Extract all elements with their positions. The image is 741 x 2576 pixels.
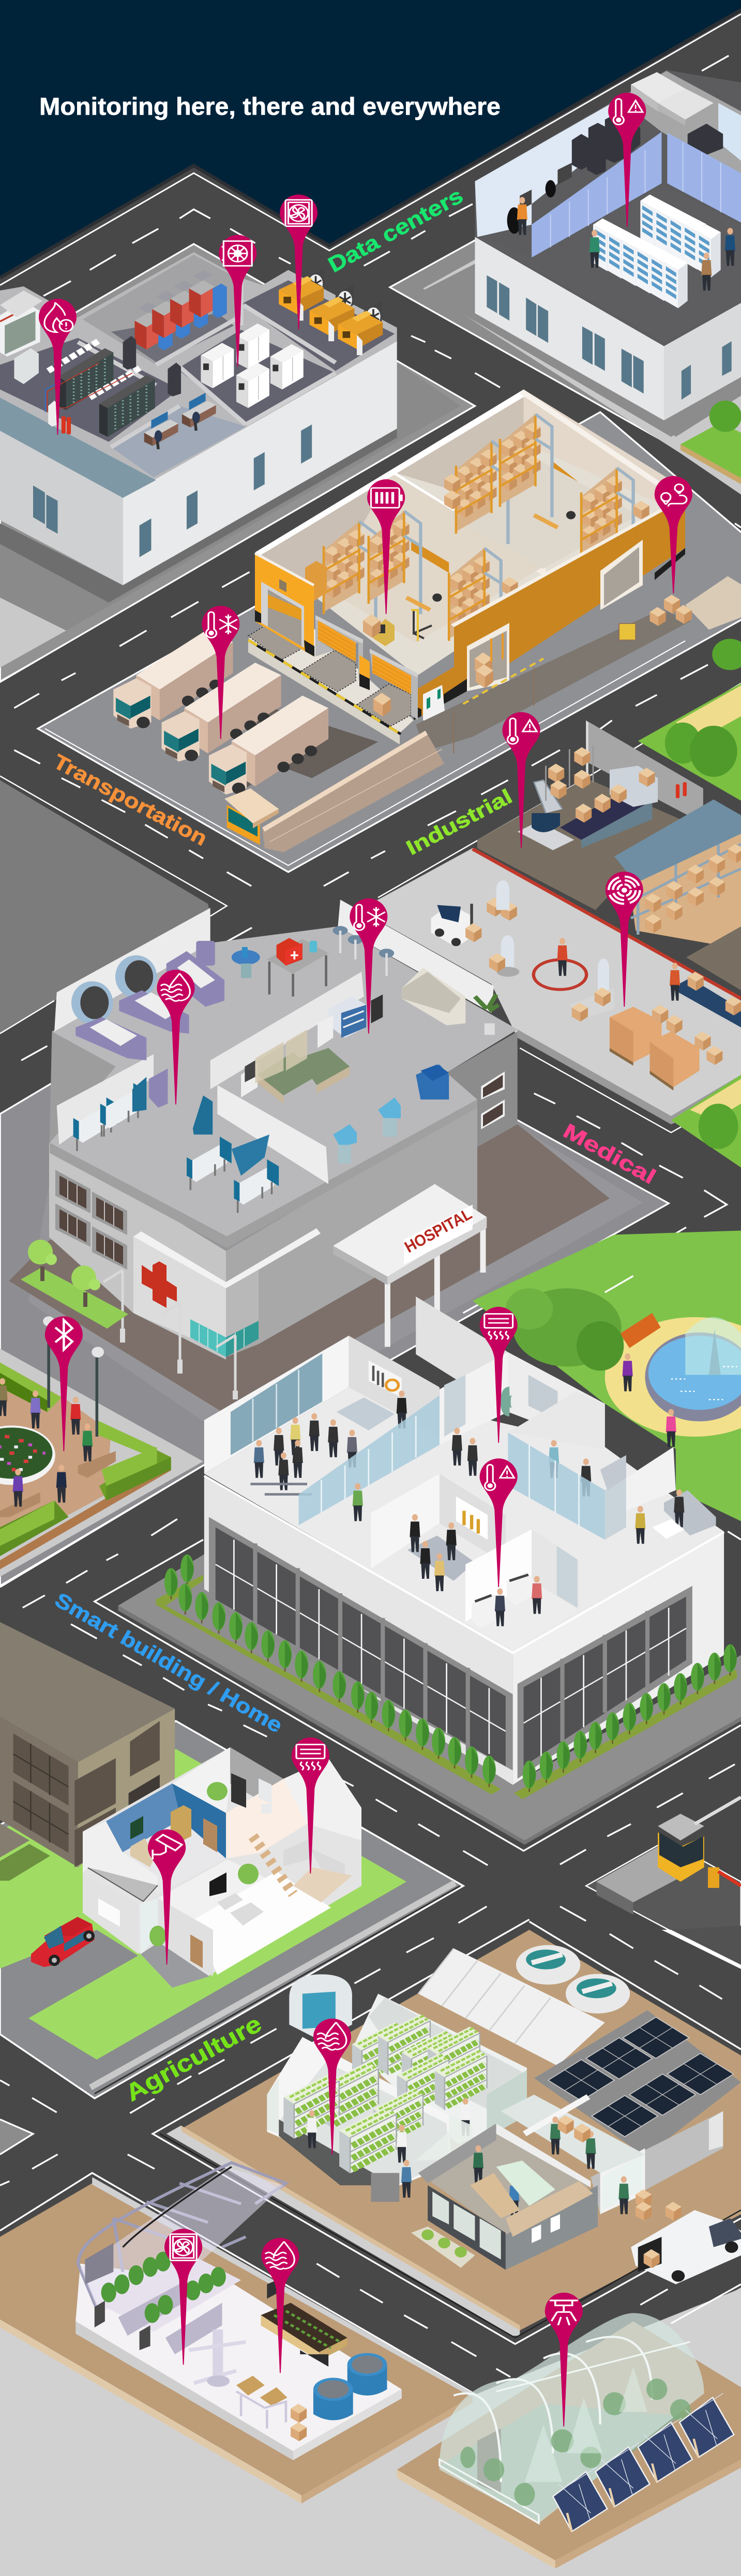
panel: industrial block bbox=[0, 639, 741, 1264]
dock base bbox=[248, 605, 414, 733]
title: Monitoring here, there and everywhere bbox=[39, 93, 501, 120]
greenhouse roofs bbox=[418, 1948, 605, 2066]
hospital sign: HOSPITAL bbox=[401, 1205, 475, 1256]
panel: lower ground and hydroponics block bbox=[0, 2162, 741, 2576]
lawns bbox=[0, 1749, 406, 1969]
lawn and tree bbox=[680, 401, 741, 484]
stools bbox=[332, 926, 394, 976]
meeting room bbox=[371, 1474, 506, 1591]
AC units bbox=[631, 72, 714, 126]
white racks top left bbox=[0, 291, 42, 384]
pin: cold chain temperature bbox=[202, 606, 239, 739]
engineers bbox=[589, 228, 735, 291]
tanks bbox=[289, 1945, 630, 2041]
green beds bbox=[255, 1029, 350, 1104]
conveyor and robot arm bbox=[518, 745, 687, 850]
blue tubs and trays bbox=[236, 2353, 387, 2441]
windows bbox=[33, 424, 312, 557]
lawn with tree top bbox=[638, 639, 741, 801]
hospital front walls bbox=[49, 1102, 477, 1360]
pin: water leak hospital bbox=[157, 970, 195, 1104]
home cutaway bbox=[83, 1747, 361, 1988]
sensor pins bbox=[39, 93, 692, 2427]
red car bbox=[31, 1917, 95, 1967]
flower bed bbox=[0, 1425, 55, 1485]
panel: smart office building bbox=[0, 1297, 741, 1939]
red cross bbox=[142, 1261, 177, 1308]
fire extinguishers bbox=[46, 363, 132, 434]
solar panels bbox=[553, 2394, 734, 2532]
lounge bbox=[600, 1455, 716, 1544]
operator desks bbox=[144, 393, 216, 449]
hallway people bbox=[353, 1391, 509, 1521]
tunnel plants bbox=[460, 2379, 691, 2506]
pin: bluetooth bbox=[45, 1316, 83, 1451]
white UPS units bbox=[201, 324, 304, 408]
parking booth bbox=[586, 1797, 741, 1939]
carts and blue kits bbox=[333, 1064, 449, 1163]
operators at workstations bbox=[507, 163, 572, 235]
yellow black curb bbox=[248, 640, 400, 744]
warehouse shelving bbox=[324, 414, 649, 651]
forklift and robots bbox=[431, 880, 614, 1022]
pin: fan bbox=[280, 194, 317, 330]
pin: greenhouse humidity bbox=[313, 2019, 351, 2155]
roof floor bbox=[50, 926, 518, 1237]
label: Medical: Medical bbox=[559, 1119, 659, 1188]
steel frame bbox=[78, 2162, 286, 2309]
label: Industrial: Industrial bbox=[403, 785, 516, 860]
big tree bbox=[506, 1288, 624, 1370]
delivery trucks bbox=[113, 630, 328, 795]
pin: office HVAC bbox=[480, 1307, 518, 1443]
boxes on pallets bbox=[610, 1005, 722, 1090]
warehouse interior bbox=[255, 389, 685, 676]
label: Agriculture: Agriculture bbox=[121, 2010, 266, 2107]
door one bbox=[261, 582, 304, 648]
glass facade left bbox=[209, 1517, 513, 1771]
panel: hospital bbox=[0, 780, 669, 1586]
pin: sprinkler bbox=[545, 2293, 583, 2427]
glass facade right bbox=[518, 1586, 692, 1779]
dock slabs bbox=[248, 612, 411, 726]
server rows bbox=[593, 194, 721, 308]
pin: office temperature alert bbox=[480, 1458, 518, 1587]
panel: data center building right bbox=[390, 70, 741, 499]
road side loading goods bbox=[453, 576, 741, 753]
cabinet and equipment bbox=[241, 995, 383, 1098]
pin: route tracking bbox=[655, 476, 692, 593]
gatehouse bbox=[224, 788, 279, 845]
apartment bbox=[0, 1622, 175, 1867]
stacked wooden pallets bbox=[305, 561, 327, 604]
pin: temperature alert bbox=[608, 93, 646, 226]
road dashes bbox=[0, 1466, 741, 1923]
dark pillars bbox=[123, 336, 181, 397]
lamp posts bbox=[43, 1316, 104, 1437]
pallet jacks bbox=[406, 511, 576, 610]
conveyor and checker bbox=[670, 963, 741, 1027]
label: Data centers: Data centers bbox=[324, 183, 467, 277]
panel: navy sky header bbox=[0, 0, 741, 646]
street lamps bbox=[103, 1270, 235, 1399]
block base bbox=[0, 1721, 463, 2098]
blue partitions bbox=[532, 132, 661, 257]
back walls bbox=[54, 908, 210, 1031]
perimeter wall bbox=[262, 730, 444, 852]
left orange wall bbox=[255, 553, 314, 657]
panel: warehouse front walls and loading docks bbox=[248, 495, 685, 744]
panel: park and fountain bbox=[463, 1230, 741, 1521]
vertical planter bbox=[189, 2329, 246, 2387]
pin: industrial temperature alert bbox=[502, 712, 540, 848]
dark battery racks bbox=[572, 115, 723, 175]
top floor bbox=[204, 1387, 724, 1653]
scanners and purple beds bbox=[71, 941, 224, 1060]
shop bbox=[411, 2095, 723, 2270]
glass office right bbox=[508, 1391, 676, 1539]
raised bed bbox=[261, 2279, 347, 2367]
pin: radar bbox=[606, 872, 643, 1007]
utility cabinet bbox=[423, 685, 445, 722]
panel: apartment and home block bbox=[0, 1622, 463, 2098]
hedge row trees bbox=[156, 1554, 737, 1800]
seated audience bbox=[250, 1413, 357, 1495]
worker in safety ring bbox=[534, 938, 586, 989]
label: Smart building / Home: Smart building / Home bbox=[51, 1589, 286, 1737]
server racks bbox=[48, 340, 155, 437]
pin: hydroponic humidity bbox=[261, 2238, 299, 2373]
medical kits and table bbox=[232, 938, 328, 997]
bench and people bbox=[620, 1313, 676, 1447]
red safety line bbox=[473, 849, 741, 999]
red and blue cabinets bbox=[134, 270, 227, 350]
label: Transportation: Transportation bbox=[50, 750, 211, 850]
windows bbox=[55, 1170, 127, 1270]
plant racks bbox=[283, 2014, 487, 2173]
pin: vault fan bbox=[219, 235, 256, 367]
pin: hydroponic fan bbox=[164, 2229, 202, 2365]
forklift and stacker bbox=[363, 610, 432, 646]
solar roof bbox=[534, 2010, 741, 2156]
pin: flame alert bbox=[39, 299, 77, 435]
entrance glass bbox=[190, 1319, 259, 1357]
panel: data center building left bbox=[0, 244, 475, 682]
pin: medical cold storage bbox=[350, 898, 387, 1033]
pin: home camera bbox=[148, 1830, 186, 1964]
grow room workers bbox=[307, 2070, 527, 2202]
second brown platform and lawn bbox=[671, 926, 741, 1167]
roller doors bbox=[315, 615, 363, 681]
delivery van bbox=[631, 2210, 741, 2284]
panel: agriculture block bbox=[0, 1919, 741, 2377]
panel: truck yard bbox=[113, 576, 741, 852]
glass partition presentation room bbox=[299, 1395, 440, 1525]
panel: solar polytunnel bbox=[397, 2313, 741, 2569]
pin: home HVAC bbox=[292, 1737, 329, 1873]
small trees and lawn bbox=[21, 1240, 128, 1329]
benches and people bbox=[0, 1378, 116, 1517]
pin: battery bbox=[367, 479, 405, 614]
tomato beds bbox=[95, 2251, 241, 2354]
generators and fans bbox=[279, 268, 383, 355]
right door openings bbox=[467, 623, 509, 691]
blue hospital beds bbox=[73, 1069, 279, 1213]
presentation room bbox=[337, 1361, 407, 1430]
brown platform and back wall bbox=[477, 720, 703, 910]
windows bbox=[487, 276, 732, 400]
shelving with blue roof bbox=[614, 800, 741, 949]
hedges bbox=[0, 1363, 171, 1556]
copy room bbox=[465, 1529, 579, 1650]
panel: plaza park bbox=[0, 1316, 203, 1577]
black plinths bbox=[414, 548, 685, 720]
entrance canopy bbox=[333, 1184, 487, 1347]
lounge sofa and plant bbox=[402, 968, 498, 1035]
panel: warehouse and transport block bbox=[38, 389, 741, 872]
